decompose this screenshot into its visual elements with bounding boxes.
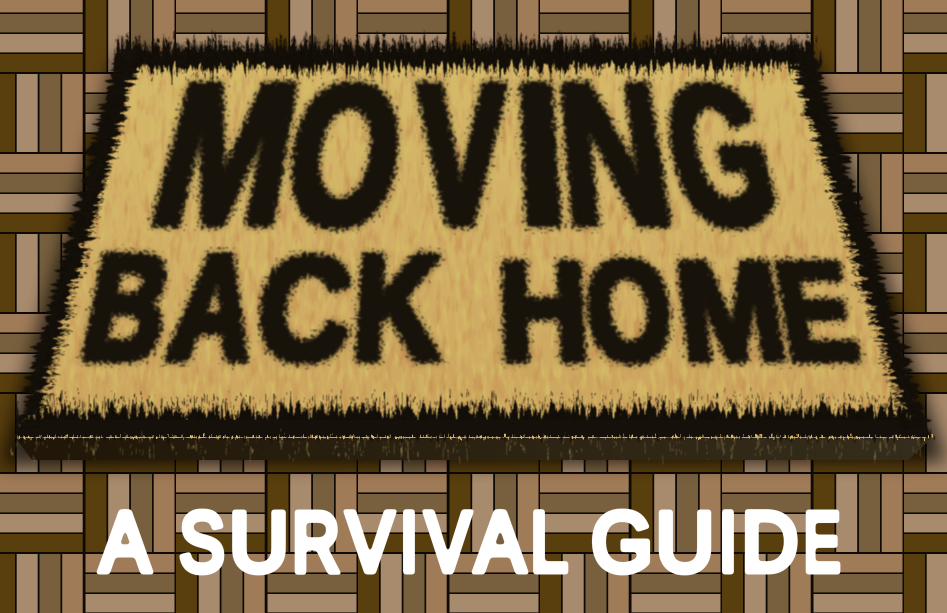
subtitle: I xyxy=(718,495,737,589)
subtitle: L xyxy=(530,495,568,589)
subtitle: G xyxy=(591,495,653,589)
subtitle: I xyxy=(400,495,418,589)
mat lettering: C xyxy=(249,229,356,395)
mat lettering: N xyxy=(552,48,687,277)
mat lettering: M xyxy=(129,48,309,277)
mat lettering: M xyxy=(669,236,796,393)
light fibre tips along the bottom edge xyxy=(16,437,932,447)
headline word: moving xyxy=(129,48,799,277)
mat front edge xyxy=(14,436,934,460)
doormat xyxy=(14,46,934,460)
mat lettering: I xyxy=(510,48,576,277)
subtitle: V xyxy=(425,495,471,589)
mat lettering: O xyxy=(271,51,407,276)
mat lettering: O xyxy=(582,234,680,394)
mat lettering: G xyxy=(653,51,799,276)
subtitle: U xyxy=(229,495,288,589)
subtitle: D xyxy=(742,495,798,589)
left and right fur bands xyxy=(16,50,930,434)
mat coir surface xyxy=(20,56,926,438)
mat lettering: E xyxy=(767,236,869,393)
headline words: back home xyxy=(70,226,869,396)
top and bottom fur bands xyxy=(14,46,932,435)
subtitle: V xyxy=(346,495,393,589)
subtitle: A xyxy=(475,495,524,589)
subtitle: E xyxy=(803,495,840,589)
mat lettering: H xyxy=(497,236,594,393)
subtitle: S xyxy=(179,495,225,589)
mat lettering: K xyxy=(348,226,442,396)
subtitle: U xyxy=(656,495,714,589)
mat lettering: A xyxy=(159,226,263,396)
mat lettering: V xyxy=(408,48,511,277)
mat lettering: B xyxy=(70,226,180,396)
subtitle: R xyxy=(292,495,339,589)
subtitle: A xyxy=(100,495,149,589)
solid dark base of the bottom fur xyxy=(14,420,932,437)
mat shadow on floor xyxy=(0,54,946,466)
